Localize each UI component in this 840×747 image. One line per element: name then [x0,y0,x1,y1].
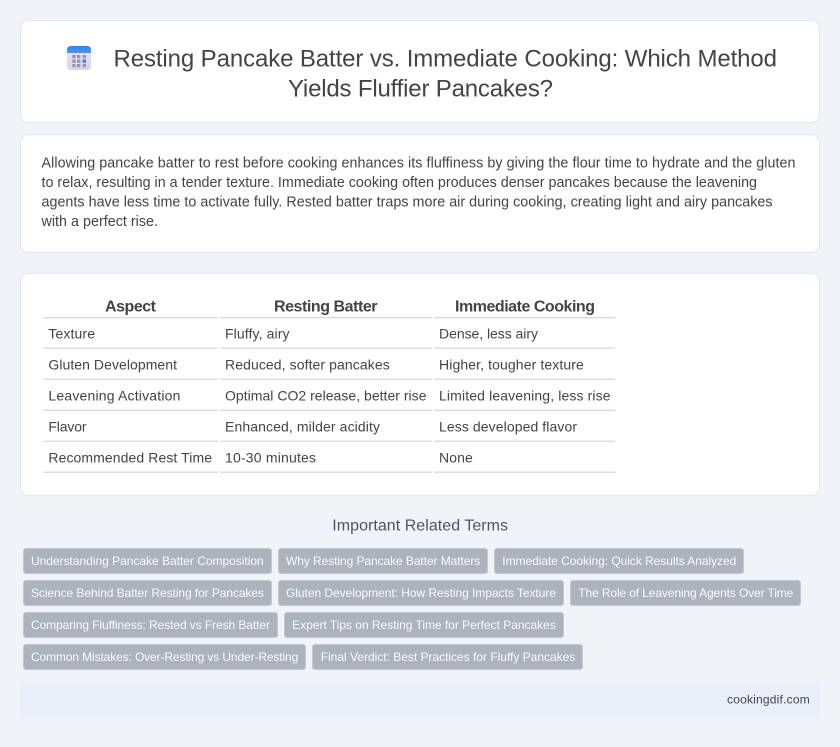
tag [494,548,744,574]
tag: Final Verdict: Best Practices for Fluffy Pancakes [321,650,575,664]
heading: related terms: Important Related Terms [332,518,508,535]
row: leavening activation: Limited leavening, less rise [439,388,611,404]
tag: Gluten Development: How Resting Impacts Texture [286,586,556,600]
tag: Comparing Fluffiness: Rested vs Fresh Batter [31,618,270,632]
row: leavening activation [48,388,611,404]
tag [312,644,582,670]
table header: Aspect [105,299,157,316]
tag: Science Behind Batter Resting for Pancakes [31,586,264,600]
related term tags [24,548,800,670]
tag: Expert Tips on Resting Time for Perfect Pancakes [292,618,556,632]
row: gluten development: Higher, tougher texture [439,357,584,373]
tag: Why Resting Pancake Batter Matters [286,554,480,568]
title: Yields Fluffier Pancakes? [288,76,553,102]
intro text [40,155,796,230]
tag: The Role of Leavening Agents Over Time [578,586,794,600]
row: flavor [48,419,577,435]
tag [24,580,272,606]
title [114,46,777,102]
footer [20,683,820,717]
row: texture [48,326,538,342]
intro text: to relax, resulting in a tender texture. Immediate cooking often produces denser pancakes because the leavening [42,175,757,191]
tag [24,612,278,638]
tag: Immediate Cooking: Quick Results Analyzed [502,554,736,568]
icon: calendar [67,46,91,70]
row: texture: Texture [48,326,95,342]
title: Resting Pancake Batter vs. Immediate Cooking: Which Method [114,46,777,72]
comparison table [43,299,615,473]
row: flavor: Enhanced, milder acidity [225,419,380,435]
row: gluten development [48,357,584,373]
table panel [20,274,820,496]
tag [278,580,564,606]
row: recommended rest time: Recommended Rest Time [48,450,212,466]
tag [24,644,306,670]
table header: Resting Batter [274,299,378,316]
row: leavening activation: Leavening Activation [48,388,180,404]
tag [24,548,272,574]
title panel [20,20,820,122]
footer: cookingdif.com [727,693,810,707]
intro text: Allowing pancake batter to rest before cooking enhances its fluffiness by giving the flour time to hydrate and the gluten [42,155,796,171]
tag [570,580,800,606]
row: recommended rest time: 10-30 minutes [225,450,316,466]
intro panel [20,134,820,252]
row: gluten development: Reduced, softer pancakes [225,357,390,373]
row: flavor: Flavor [48,419,87,435]
row: recommended rest time [48,450,473,466]
intro text: with a perfect rise. [40,214,158,230]
row: gluten development: Gluten Development [48,357,177,373]
row: texture: Dense, less airy [439,326,538,342]
tag [284,612,564,638]
table header [105,299,595,316]
row: flavor: Less developed flavor [439,419,577,435]
row: recommended rest time: None [439,450,473,466]
tag [278,548,488,574]
table header: Immediate Cooking [455,299,595,316]
tag: Common Mistakes: Over-Resting vs Under-Resting [31,650,298,664]
intro text: agents have less time to activate fully. Rested batter traps more air during cooking, creating light and airy pancakes [42,194,772,210]
row: texture: Fluffy, airy [225,326,290,342]
tag: Understanding Pancake Batter Composition [31,554,264,568]
row: leavening activation: Optimal CO2 release, better rise [225,388,427,404]
